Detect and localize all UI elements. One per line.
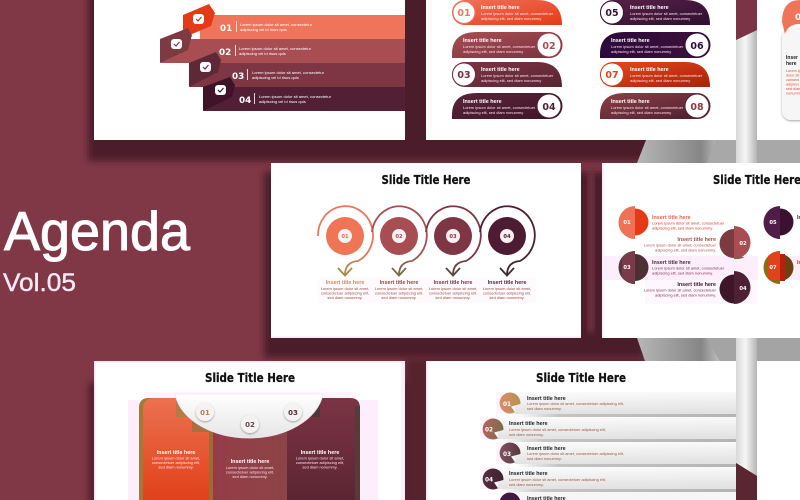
pill 02: [452, 32, 562, 58]
pill 04: Insert title here: [463, 99, 502, 105]
column 02: Insert title here: [231, 459, 269, 465]
column 01: [139, 398, 213, 500]
column 01: Insert title here: [157, 450, 195, 456]
step 03: sed diam nonummy.: [435, 295, 471, 300]
pill 05: adipiscing elit, sed diam nonummy: [630, 16, 690, 21]
panel: cropped slide top right: dolor sit: [786, 74, 800, 78]
item 05: [764, 206, 800, 239]
item 03: [618, 250, 725, 285]
pill 05: Lorem ipsum dolor sit amet, consectetuer: [630, 11, 703, 16]
row 04: Lorem ipsum dolor sit amet, consectetuer adipiscing elit,: [509, 477, 606, 482]
column 03: consectetuer adipiscing elit,: [296, 460, 344, 465]
pill 03: [452, 62, 562, 87]
slide title: Slide Title Here: [536, 371, 626, 385]
pill 07: [600, 62, 710, 87]
panel: stepped list slide: [94, 0, 405, 140]
step 01: consectetuer adipiscing elit,: [321, 290, 369, 296]
bar 02: [160, 39, 405, 63]
row 02: Lorem ipsum dolor sit amet, consectetuer adipiscing elit,: [509, 427, 606, 432]
row 03: sed diam nonummy.: [527, 456, 562, 461]
column 03: [287, 398, 360, 500]
pill 04: Lorem ipsum dolor sit amet, consectetuer: [463, 105, 536, 110]
step 04: 04: [503, 234, 511, 240]
slide title: Slide Title Here: [205, 371, 295, 385]
panel: cropped slide top right: adipisci: [786, 82, 799, 86]
step 04: consectetuer adipiscing elit,: [483, 290, 531, 296]
tag 04 with check icon: [203, 77, 235, 110]
item 02: [644, 226, 750, 259]
pill 07: Lorem ipsum dolor sit amet, consectetuer: [630, 73, 703, 78]
pill 06: [600, 32, 710, 58]
step 02: Insert title here: [380, 280, 418, 286]
pill 06: adipiscing elit, sed diam nonummy: [611, 49, 671, 54]
row 04: sed diam nonummy.: [509, 482, 544, 487]
column 01: sed diam nonummy.: [158, 464, 194, 470]
panel: cropped slide top right: [757, 0, 800, 140]
column 03: sed diam nonummy.: [302, 464, 338, 470]
row 03: Insert title here: [527, 446, 566, 452]
row 03: Lorem ipsum dolor sit amet, consectetuer adipiscing elit,: [527, 451, 624, 456]
item 01: Insert title here: [652, 215, 691, 221]
pill 02: adipiscing elit, sed diam nonummy: [463, 49, 523, 54]
row 05: [500, 492, 736, 500]
pill 08: [600, 93, 710, 119]
pill 08: 08: [690, 102, 704, 113]
pill 06: Lorem ipsum dolor sit amet, consectetuer: [611, 44, 684, 49]
row 02: 02: [485, 428, 493, 434]
panel: cropped slide bottom right: [757, 361, 800, 500]
column 01: Lorem ipsum dolor sit amet,: [152, 456, 200, 460]
step 04: Lorem ipsum dolor sit amet,: [483, 286, 531, 291]
item 01: Lorem ipsum dolor sit amet, consectetuer: [652, 220, 725, 226]
bar 03: 03: [232, 72, 244, 82]
row 01: Insert title here: [527, 396, 566, 402]
pill 02: 02: [542, 41, 556, 52]
pill 02: Insert title here: [463, 38, 502, 44]
column 02: consectetuer adipiscing elit,: [226, 470, 274, 474]
pill 04: 04: [542, 102, 556, 113]
item 03: 03: [623, 265, 631, 271]
row 04: 04: [485, 478, 493, 484]
slide title: Slide Title Here: [382, 173, 470, 187]
pill 06: Insert title here: [611, 38, 650, 44]
item 02: Insert title here: [677, 237, 716, 243]
bar 03: Lorem ipsum dolor sit amet, consectetur: [252, 70, 325, 75]
item 04: 04: [739, 286, 747, 292]
bar 02: adipiscing vel id risus quis: [239, 51, 286, 56]
item 04: adipiscing elit, sed diam nonummy.: [655, 292, 716, 298]
pill 08: Lorem ipsum dolor sit amet, consectetuer: [611, 105, 684, 110]
item 01: 01: [623, 220, 631, 226]
step 02: Lorem ipsum dolor sit amet,: [375, 286, 423, 291]
bar 04: Lorem ipsum dolor sit amet, consectetur: [259, 94, 332, 99]
tag 01 with check icon: [183, 4, 215, 34]
pill 02: Lorem ipsum dolor sit amet, consectetuer: [463, 44, 536, 49]
step 02: consectetuer adipiscing elit,: [375, 290, 423, 296]
bar 04: [203, 87, 405, 111]
bowl cut-out: [175, 394, 323, 438]
pill 06: 06: [690, 41, 704, 52]
bar 01: Lorem ipsum dolor sit amet, consectetur: [240, 22, 313, 27]
row 03: 03: [503, 452, 511, 458]
row 04: Insert title here: [509, 471, 548, 477]
pill 04: [452, 93, 562, 119]
item 05: 05: [769, 220, 777, 226]
bar 03: [189, 63, 405, 87]
pill 03: adipiscing elit, sed diam nonummy: [481, 78, 541, 83]
pill 08: Insert title here: [611, 99, 650, 105]
item 03: adipiscing elit, sed diam nonummy.: [652, 270, 713, 276]
tag 03 with check icon: [189, 52, 221, 86]
item 07: 07: [769, 265, 777, 271]
pill 04: adipiscing elit, sed diam nonummy: [463, 110, 523, 115]
pill 05: 05: [605, 8, 619, 19]
bar 02: 02: [219, 48, 231, 58]
row 01: Lorem ipsum dolor sit amet, consectetuer adipiscing elit,: [527, 401, 624, 406]
step 01: sed diam nonummy.: [327, 295, 363, 300]
step 03: Insert title here: [434, 280, 472, 286]
panel: cropped slide top right: consect: [786, 78, 800, 82]
row 01: [500, 392, 736, 417]
column 02: [213, 398, 287, 500]
column 02: Lorem ipsum dolor sit amet,: [226, 465, 274, 470]
bar 01: adipiscing vel id risus quis: [240, 27, 287, 32]
pill 07: Insert title here: [630, 67, 669, 73]
step 01: Lorem ipsum dolor sit amet,: [321, 286, 369, 291]
step 02: sed diam nonummy.: [381, 295, 417, 300]
tag 02 with check icon: [160, 28, 192, 62]
badge 02: [241, 415, 259, 433]
step 01: [318, 206, 373, 300]
column 03: Insert title here: [301, 450, 339, 456]
step 04: sed diam nonummy.: [489, 295, 525, 300]
item 02: adipiscing elit, sed diam nonummy.: [655, 248, 716, 252]
item 03: Lorem ipsum dolor sit amet, consectetuer: [652, 266, 725, 270]
panel: cropped slide top right: Inser: [786, 55, 798, 61]
badge 03: [284, 403, 302, 421]
item 02: 02: [739, 241, 747, 247]
item 01: [618, 206, 725, 239]
step 01: Insert title here: [326, 280, 364, 286]
pill 05: [600, 0, 710, 25]
pill 03: Lorem ipsum dolor sit amet, consectetuer: [481, 73, 554, 78]
item 07: [764, 250, 800, 284]
item 04: Insert title here: [677, 282, 716, 288]
pill 01: adipiscing elit, sed diam nonummy: [481, 16, 541, 21]
item 03: Insert title here: [652, 260, 691, 266]
pill 07: adipiscing elit, sed diam nonummy: [630, 78, 690, 83]
step 02: [372, 206, 427, 300]
pill 01: 01: [457, 8, 471, 19]
step 01: 01: [341, 234, 349, 240]
pill 07: 07: [605, 70, 619, 81]
column 03: Lorem ipsum dolor sit amet,: [296, 456, 344, 460]
bar 01: [200, 15, 405, 39]
column 02: sed diam nonummy.: [232, 474, 268, 479]
badge 03: 03: [288, 409, 298, 417]
panel: stacked rows slide: [426, 361, 736, 500]
badge 02: 02: [245, 421, 255, 429]
panel: split circles slide: [602, 163, 800, 338]
bar 04: 04: [239, 96, 251, 106]
pill 03: Insert title here: [481, 67, 520, 73]
pill 03: 03: [457, 70, 471, 81]
subtitle: Vol.05: Vol.05: [3, 269, 76, 297]
step 02: 02: [395, 234, 403, 240]
bar 04: adipiscing vel id risus quis: [259, 99, 306, 104]
pill 01: [452, 0, 562, 25]
pill 08: adipiscing elit, sed diam nonummy: [611, 110, 671, 115]
pill 05: Insert title here: [630, 5, 669, 11]
badge 01: [196, 403, 214, 421]
step 04: Insert title here: [488, 280, 526, 286]
bar 03: adipiscing vel id risus quis: [252, 75, 299, 80]
step 03: [426, 206, 481, 300]
panel: pill list slide: [426, 0, 736, 140]
row 01: 01: [503, 402, 511, 408]
column 01: consectetuer adipiscing elit,: [152, 460, 200, 465]
row 02: Insert title here: [509, 421, 548, 427]
panel: three column bowl slide: [94, 361, 405, 500]
row 03: [500, 442, 736, 467]
step 03: 03: [449, 234, 457, 240]
step 03: consectetuer adipiscing elit,: [429, 290, 477, 296]
panel: cropped slide top right: here: [786, 61, 797, 67]
item 04: Lorem ipsum dolor sit amet, consectetuer: [644, 288, 717, 292]
badge 01: 01: [200, 409, 210, 417]
step 03: Lorem ipsum dolor sit amet,: [429, 286, 477, 291]
bar 01: 01: [220, 24, 232, 34]
row 04: [483, 467, 736, 492]
pill 01: Insert title here: [481, 5, 520, 11]
panel: spiral arrows slide: [271, 163, 581, 338]
row 02: [483, 417, 736, 442]
row 02: sed diam nonummy.: [509, 432, 544, 437]
item 02: Lorem ipsum dolor sit amet, consectetuer: [644, 242, 717, 248]
title: Agenda: Agenda: [4, 200, 190, 262]
bar 02: Lorem ipsum dolor sit amet, consectetur: [239, 46, 312, 51]
pill 01: Lorem ipsum dolor sit amet, consectetuer: [481, 11, 554, 16]
row 01: sed diam nonummy.: [527, 406, 562, 411]
step 04: [480, 206, 535, 300]
item 01: adipiscing elit, sed diam nonummy.: [652, 226, 713, 230]
item 04: [644, 271, 750, 304]
